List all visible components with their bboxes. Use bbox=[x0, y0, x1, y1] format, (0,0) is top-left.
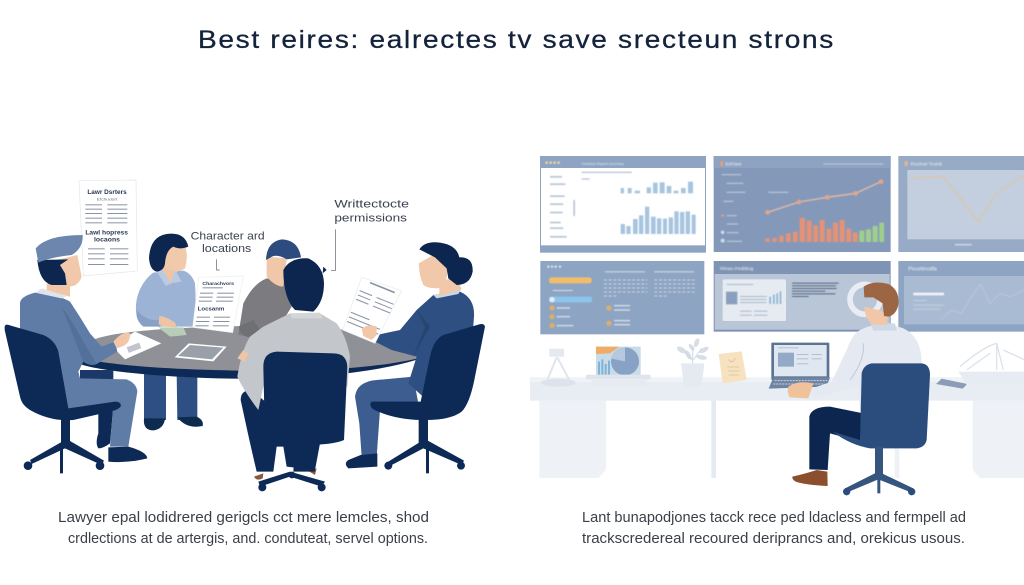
icon: ship model bbox=[958, 343, 1024, 385]
panel: dashboards wall bbox=[540, 156, 1024, 334]
dashboard 3: trend area: Ruclcet Truick bbox=[911, 162, 942, 168]
panel: office scene bbox=[530, 282, 1024, 495]
dashboard 2: line and bars bbox=[714, 156, 891, 252]
callout: character and locations: Character ard bbox=[191, 230, 265, 242]
paper: floating document: Etchudort bbox=[97, 198, 117, 202]
caption: right bbox=[582, 510, 966, 547]
paper: floating document: Lawr Dsrters bbox=[87, 189, 127, 196]
dashboard 5: report card bbox=[714, 261, 891, 332]
person: woman at back left bbox=[136, 234, 203, 430]
tablet on table bbox=[175, 343, 227, 361]
person: man in front, seen from behind bbox=[237, 258, 350, 491]
paper on table bbox=[112, 332, 161, 359]
caption: right: Lant bunapodjones tacck rece ped ldacless and fermpell ad bbox=[582, 510, 966, 526]
document on table: Charachvors bbox=[202, 281, 234, 287]
caption: left bbox=[58, 510, 429, 547]
callout: character and locations bbox=[191, 230, 265, 270]
chair: analyst bbox=[833, 363, 930, 495]
dashboard 2: line and bars: Ei/Oiee bbox=[725, 162, 742, 168]
icon: chart monitor on stand bbox=[586, 347, 651, 386]
callout: written permissions: permissions bbox=[334, 213, 408, 225]
callout: character and locations: locations bbox=[202, 243, 252, 255]
callout: written permissions bbox=[331, 199, 409, 271]
paper: floating document: locaons bbox=[94, 236, 121, 243]
person: analyst at desk bbox=[788, 282, 930, 495]
dashboard 1: bar charts bbox=[540, 156, 706, 253]
chair: left bbox=[5, 325, 121, 473]
round table bbox=[76, 326, 418, 379]
person: man at back bbox=[238, 239, 301, 338]
icon: potted plant bbox=[676, 337, 709, 387]
dashboard 5: report card: Klmao rHuBBog bbox=[720, 266, 754, 271]
title: Best reires: ealrectes tv save srecteun strons bbox=[198, 26, 835, 54]
panel: meeting scene bbox=[5, 180, 485, 491]
paper: floating document bbox=[79, 180, 137, 276]
dashboard 4: calendar bbox=[540, 261, 704, 334]
person: man on left with cap bbox=[5, 235, 147, 473]
callout: written permissions: Writtectocte bbox=[334, 199, 409, 211]
paper: floating document: Lawl hopress bbox=[85, 230, 128, 237]
dashboard 6: line chart bbox=[898, 261, 1024, 332]
person: woman on right with bun bbox=[343, 242, 485, 473]
caption: left: Lawyer epal lodidrered gerigcls cct mere lemcles, shod bbox=[58, 510, 429, 526]
laptop bbox=[769, 343, 830, 389]
dashboard 6: line chart: Peuetinodfa bbox=[908, 267, 937, 273]
icon: note card bbox=[719, 351, 747, 383]
hands of woman at back left bbox=[159, 316, 177, 327]
green folder bbox=[158, 327, 187, 337]
dashboard 1: bar charts: Oveniew Report summary bbox=[582, 162, 624, 166]
caption: left: crdlections at de artergis, and. conduteat, servel options. bbox=[68, 531, 428, 547]
dashboard 3: trend area bbox=[898, 156, 1024, 252]
document on table: Locsanm bbox=[198, 307, 225, 313]
caption: right: trackscredereal recoured deriprancs and, orekicus usous. bbox=[582, 531, 965, 547]
document on table bbox=[193, 276, 243, 333]
chair: right bbox=[370, 324, 485, 473]
icon: phone on desk bbox=[936, 379, 967, 389]
desk bbox=[530, 377, 1024, 478]
icon: desk lamp bbox=[541, 349, 576, 387]
paper held by woman bbox=[343, 277, 402, 343]
